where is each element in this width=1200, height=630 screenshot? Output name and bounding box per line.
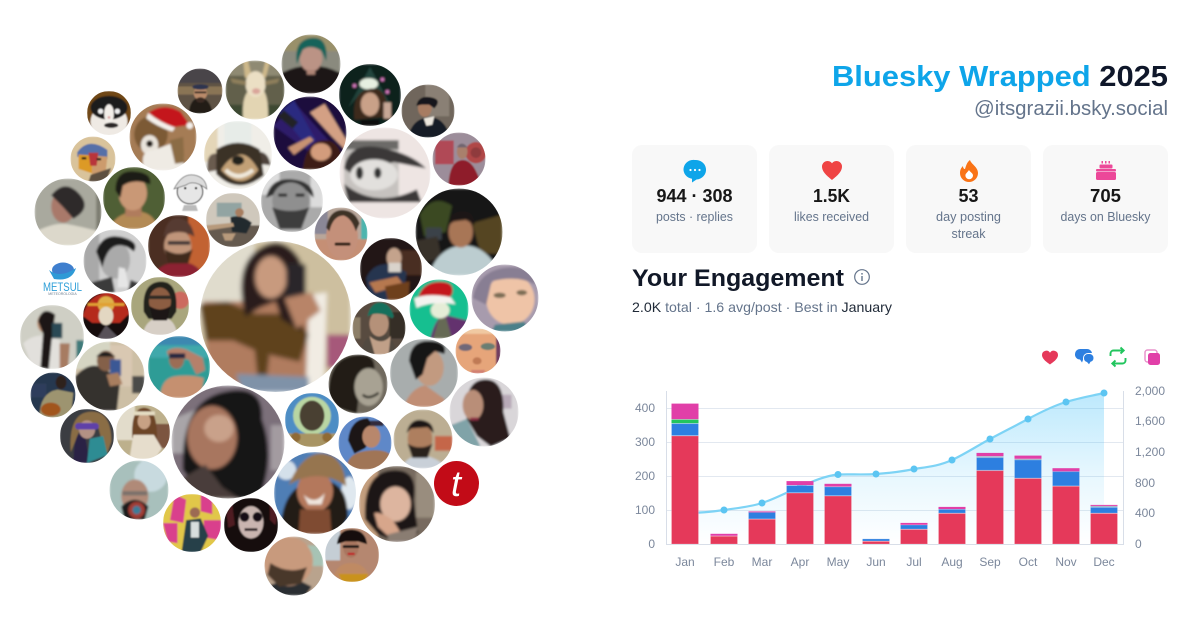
avatar: man seated in front of wall xyxy=(206,193,260,247)
avatar: Metsul logo xyxy=(43,262,82,296)
panel: streak stat xyxy=(906,145,1031,253)
bar: Feb xyxy=(710,534,738,544)
stat value: 944 · 308 xyxy=(656,186,732,206)
avatar: halo portrait xyxy=(285,393,339,447)
avatar: green santa cartoon xyxy=(410,280,468,338)
avatar: bearded man in grey tee xyxy=(394,410,452,468)
month labels: Jun xyxy=(866,555,886,569)
stat label: posts · replies xyxy=(656,210,733,224)
avatar: black and white thinking man xyxy=(84,230,146,292)
icon: legend quotes xyxy=(1145,350,1160,365)
avatar: smiling woman in bucket hat xyxy=(274,452,356,534)
avatar: black and white curly hair portrait xyxy=(328,354,388,414)
panel: avatar bubble cluster xyxy=(20,34,538,596)
icon: legend heart xyxy=(1042,351,1058,364)
bar: Sep xyxy=(976,453,1004,544)
month labels: Dec xyxy=(1093,555,1115,569)
avatar: red Tumblr logo: t xyxy=(451,463,463,504)
panel: posts and replies stat xyxy=(632,145,757,253)
icon: legend reposts xyxy=(1110,348,1126,366)
avatar: large selfie woman in leopard top xyxy=(200,241,351,392)
title: Bluesky Wrapped 2025 xyxy=(832,61,1168,93)
avatar: pink and yellow poster xyxy=(163,494,221,552)
icon: speech bubble xyxy=(683,160,706,182)
avatar: sketched cartoon head xyxy=(173,174,208,212)
cumulative area xyxy=(685,393,1104,544)
avatar: white goat xyxy=(226,60,284,120)
right axis labels: 1,200 xyxy=(1135,445,1165,459)
icon: legend replies xyxy=(1075,349,1094,364)
avatar: bearded man in profile xyxy=(264,536,324,596)
bar: Mar xyxy=(748,511,776,544)
panel: likes stat xyxy=(769,145,894,253)
avatar: big man with white beard xyxy=(360,238,422,300)
avatar: young man with green background xyxy=(103,167,165,229)
left axis labels xyxy=(635,401,655,551)
stat value: 1.5K xyxy=(813,186,850,206)
avatar: elf man with beard xyxy=(148,215,210,277)
avatar: dark hair shirtless man xyxy=(390,339,458,407)
avatar: black and white bearded man xyxy=(261,170,323,232)
left axis labels: 200 xyxy=(635,469,655,483)
month labels: Mar xyxy=(752,555,772,569)
avatar: bald man with glasses xyxy=(110,460,168,520)
bar: Jun xyxy=(862,539,890,544)
left axis labels: 0 xyxy=(648,537,655,551)
month labels: Oct xyxy=(1019,555,1038,569)
bar: Nov xyxy=(1052,468,1080,544)
stat value: 705 xyxy=(1090,186,1121,206)
avatar: man with mustache xyxy=(314,208,368,260)
cumulative line xyxy=(685,393,1104,513)
bar: Aug xyxy=(938,507,966,544)
right axis labels: 2,000 xyxy=(1135,384,1165,398)
month labels: Aug xyxy=(941,555,963,569)
panel: days on Bluesky stat xyxy=(1043,145,1168,253)
engagement summary: 2.0K total · 1.6 avg/post · Best in January xyxy=(632,299,892,315)
avatar: cubist blue and yellow face xyxy=(70,136,116,182)
chart: monthly engagement bars and cumulative line xyxy=(635,384,1165,569)
avatar: black and white woman lying sideways xyxy=(340,128,430,218)
avatar: skull makeup woman xyxy=(224,498,278,552)
avatar: red Tumblr logo xyxy=(434,461,479,506)
avatar: telescope illustration xyxy=(274,96,346,170)
bar: Jan xyxy=(672,404,698,544)
avatar: man with red plaid shirt xyxy=(432,132,486,186)
month labels: Sep xyxy=(979,555,1001,569)
avatar: man seen from behind xyxy=(34,178,102,246)
icon: birthday cake xyxy=(1096,161,1116,180)
avatar: hoodie man mirror selfie xyxy=(76,342,144,410)
avatar: smiling dachshund xyxy=(204,121,272,189)
avatar: shirtless man at the beach xyxy=(148,336,210,398)
icon: heart xyxy=(822,161,842,180)
month labels: Jul xyxy=(906,555,922,569)
line points xyxy=(720,390,1108,514)
avatar: woman with flower crown xyxy=(339,64,401,126)
avatar: man with hat and glasses xyxy=(178,68,222,114)
left axis labels: 300 xyxy=(635,435,655,449)
avatar: teal hair woman with hood xyxy=(60,409,114,463)
avatar: flower crown curly woman xyxy=(116,405,170,459)
right axis labels xyxy=(1135,384,1165,551)
stat label second line: streak xyxy=(952,227,986,241)
avatar: young woman resting chin on hand xyxy=(359,466,435,542)
bar: May xyxy=(824,484,852,544)
chart legend xyxy=(1042,348,1160,366)
bar: Dec xyxy=(1090,505,1118,544)
avatar: Metsul logo: METEOROLOGIA xyxy=(48,292,77,296)
avatar: green hair woman xyxy=(282,34,340,94)
avatar: green cap woman xyxy=(352,302,406,354)
month labels xyxy=(675,555,1115,569)
month labels: May xyxy=(827,555,849,569)
stat value: 53 xyxy=(958,186,978,206)
avatar: dark illustrated portrait xyxy=(83,293,129,339)
stat label: days on Bluesky xyxy=(1060,210,1151,224)
bar: Apr xyxy=(786,481,814,544)
avatar: Metsul logo: METSUL xyxy=(43,280,82,294)
handle: @itsgrazii.bsky.social xyxy=(974,98,1168,120)
month labels: Apr xyxy=(791,555,809,569)
stat label: likes received xyxy=(794,210,869,224)
right axis labels: 0 xyxy=(1135,537,1142,551)
icon: flame xyxy=(960,160,978,182)
avatar: woman looking up against blue xyxy=(338,416,392,470)
avatar: woman with glasses and red lipstick xyxy=(325,528,379,582)
avatar: long dark hair woman xyxy=(450,378,518,446)
avatar: dreadlocks man with glasses xyxy=(131,277,189,335)
avatar: black and white cat xyxy=(87,91,131,135)
left axis labels: 400 xyxy=(635,401,655,415)
month labels: Jan xyxy=(675,555,695,569)
avatar: close up of blue eyes xyxy=(456,328,500,374)
section heading: Your Engagement: Your Engagement xyxy=(632,265,844,292)
month labels: Feb xyxy=(714,555,735,569)
month labels: Nov xyxy=(1055,555,1077,569)
avatar: dark jacket man by building xyxy=(402,84,454,138)
avatar: curly hair woman large xyxy=(172,386,284,498)
icon: info xyxy=(855,270,869,284)
bar: Jul xyxy=(900,523,928,544)
right axis labels: 1,600 xyxy=(1135,414,1165,428)
right axis labels: 400 xyxy=(1135,506,1155,520)
avatar: person lying on couch xyxy=(30,372,76,418)
avatar: long hair man mirror selfie xyxy=(20,305,84,369)
right axis labels: 800 xyxy=(1135,476,1155,490)
bar: Oct xyxy=(1014,456,1042,544)
left axis labels: 100 xyxy=(635,503,655,517)
stat label: day posting xyxy=(936,210,1001,224)
avatar: anime man xyxy=(472,264,538,332)
avatar: man with camera at night xyxy=(416,188,502,276)
avatar: dog with santa hat xyxy=(130,104,196,170)
